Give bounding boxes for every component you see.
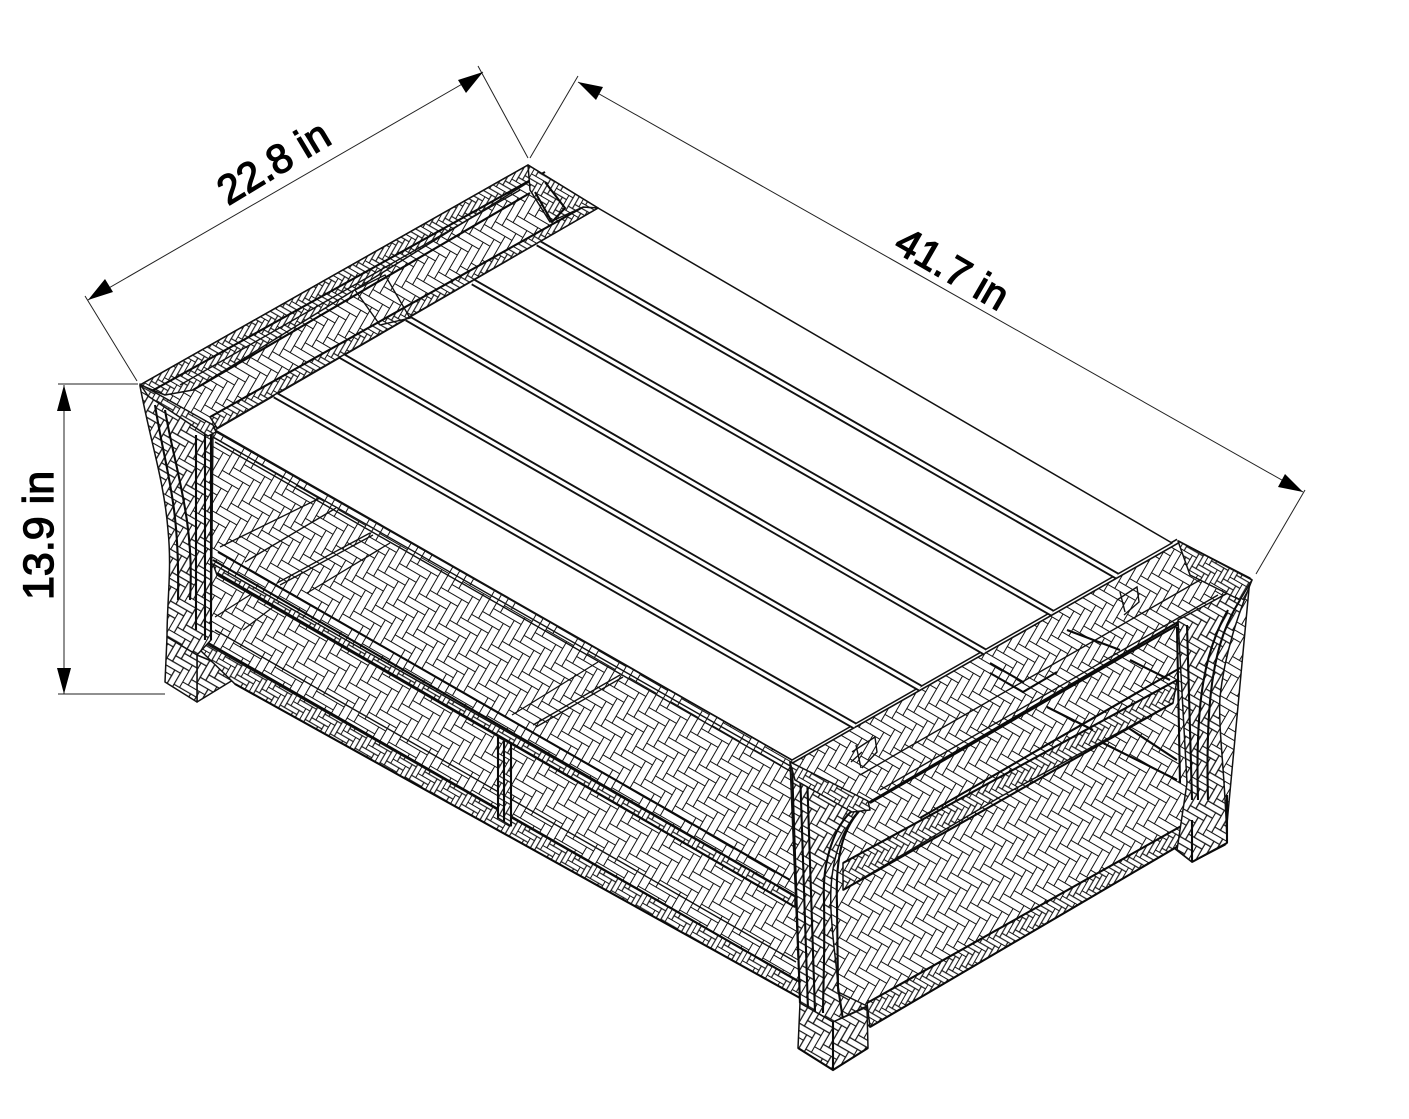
- left near foot side: [197, 655, 233, 702]
- corner clip detail: [851, 737, 877, 768]
- foot: [798, 1003, 868, 1070]
- shelf braces: [215, 498, 623, 727]
- near leg: [790, 762, 870, 1070]
- upper rail strips: [843, 680, 1177, 890]
- foot: [165, 637, 197, 702]
- dimension: width 22.8 in: 22.8 in: [209, 111, 338, 214]
- right end face: [792, 541, 1252, 1027]
- far right foot: [1160, 795, 1227, 862]
- top edge of right end: [792, 541, 1178, 761]
- long front face: [200, 430, 805, 1000]
- dimension: height 13.9 in: [15, 384, 165, 694]
- dimension: height 13.9 in: 13.9 in: [15, 471, 63, 600]
- top left end frame: [140, 165, 598, 428]
- centre divider: [498, 737, 511, 826]
- left leg: [140, 384, 216, 702]
- dimension: length 41.7 in: [530, 76, 1305, 574]
- slats: [275, 243, 1117, 726]
- glass top with slats: [213, 208, 1172, 771]
- far right leg: [1177, 541, 1252, 862]
- table drawing: [140, 165, 1252, 1070]
- dimension: length 41.7 in: 41.7 in: [888, 218, 1017, 319]
- rear interior bars: [990, 630, 1177, 780]
- dimension: width 22.8 in: [85, 66, 528, 381]
